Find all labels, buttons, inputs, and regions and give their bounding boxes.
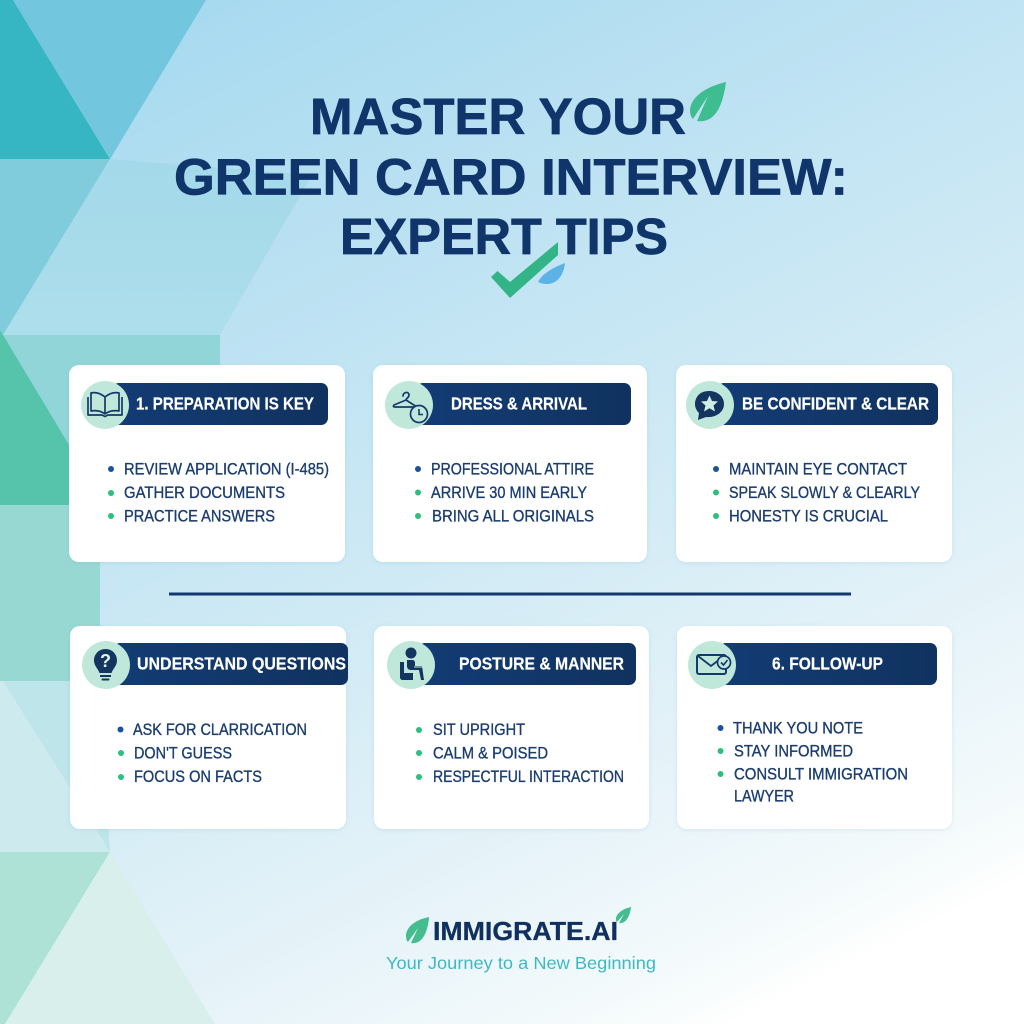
bullet list: LAWYER: [734, 786, 794, 805]
header bar: [113, 643, 348, 685]
header bar: [717, 383, 938, 425]
bullet list: BRING ALL ORIGINALS: [432, 506, 594, 525]
bullet list: REVIEW APPLICATION (I-485): [124, 459, 329, 478]
bullet list: SPEAK SLOWLY & CLEARLY: [729, 483, 920, 502]
bullet list: RESPECTFUL INTERACTION: [433, 767, 624, 786]
bullet list: HONESTY IS CRUCIAL: [729, 506, 888, 525]
panel: follow-up: [677, 626, 952, 829]
icon: speech bubble with star: [686, 381, 734, 429]
icon: left logo leaf: [406, 917, 429, 943]
bullet list: CALM & POISED: [433, 743, 548, 762]
footer logo: [386, 907, 656, 973]
bullet list: ARRIVE 30 MIN EARLY: [431, 483, 587, 502]
icon: seated person: [387, 641, 435, 689]
tagline: Your Journey to a New Beginning: [386, 953, 656, 973]
panel: posture and manner: [374, 626, 649, 829]
bullet list: [713, 459, 920, 525]
header bar: [112, 383, 328, 425]
icon: question light bulb: [82, 641, 130, 689]
icon: right logo leaf: [616, 907, 631, 923]
icon: title leaf: [690, 82, 726, 121]
icon: title blue leaf: [538, 263, 565, 284]
panel: be confident and clear: [676, 365, 952, 562]
panel: preparation is key: [69, 365, 345, 562]
bullet list: THANK YOU NOTE: [733, 718, 863, 737]
heading: BE CONFIDENT & CLEAR: [742, 393, 929, 413]
panel: dress and arrival: [373, 365, 647, 562]
heading: DRESS & ARRIVAL: [451, 393, 587, 413]
bullet list: DON'T GUESS: [134, 743, 232, 762]
title: MASTER YOUR: [310, 88, 686, 145]
bullet list: SIT UPRIGHT: [433, 720, 525, 739]
header bar: [719, 643, 937, 685]
heading: POSTURE & MANNER: [459, 653, 624, 673]
bullet list: PROFESSIONAL ATTIRE: [431, 459, 594, 478]
bullet list: MAINTAIN EYE CONTACT: [729, 459, 907, 478]
bullet list: [718, 718, 908, 805]
bullet list: FOCUS ON FACTS: [134, 767, 262, 786]
bullet list: STAY INFORMED: [734, 741, 853, 760]
heading: 1. PREPARATION IS KEY: [136, 393, 314, 413]
header bar: [418, 643, 636, 685]
title: GREEN CARD INTERVIEW:: [174, 148, 848, 206]
bullet list: GATHER DOCUMENTS: [124, 483, 285, 502]
bullet list: [108, 459, 329, 525]
icon: title check mark: [491, 242, 558, 298]
background geometric facets: [0, 0, 312, 1024]
bullet list: CONSULT IMMIGRATION: [734, 764, 908, 783]
bullet list: [416, 720, 624, 786]
panel: understand questions: [70, 626, 348, 829]
brand name: IMMIGRATE.AI: [433, 916, 618, 946]
bullet list: ASK FOR CLARRICATION: [133, 720, 307, 739]
heading: 6. FOLLOW-UP: [772, 653, 883, 673]
heading: UNDERSTAND QUESTIONS: [137, 653, 346, 673]
divider line: [169, 592, 851, 596]
bullet list: [118, 720, 307, 786]
icon: hanger and clock: [385, 381, 433, 429]
bullet list: [415, 459, 594, 525]
title: EXPERT TIPS: [340, 208, 668, 265]
title: [174, 88, 848, 265]
icon: question light bulb: ?: [100, 651, 111, 671]
header bar: [416, 383, 631, 425]
icon: open book: [81, 381, 129, 429]
icon: envelope with check: [688, 641, 736, 689]
bullet list: PRACTICE ANSWERS: [124, 506, 275, 525]
